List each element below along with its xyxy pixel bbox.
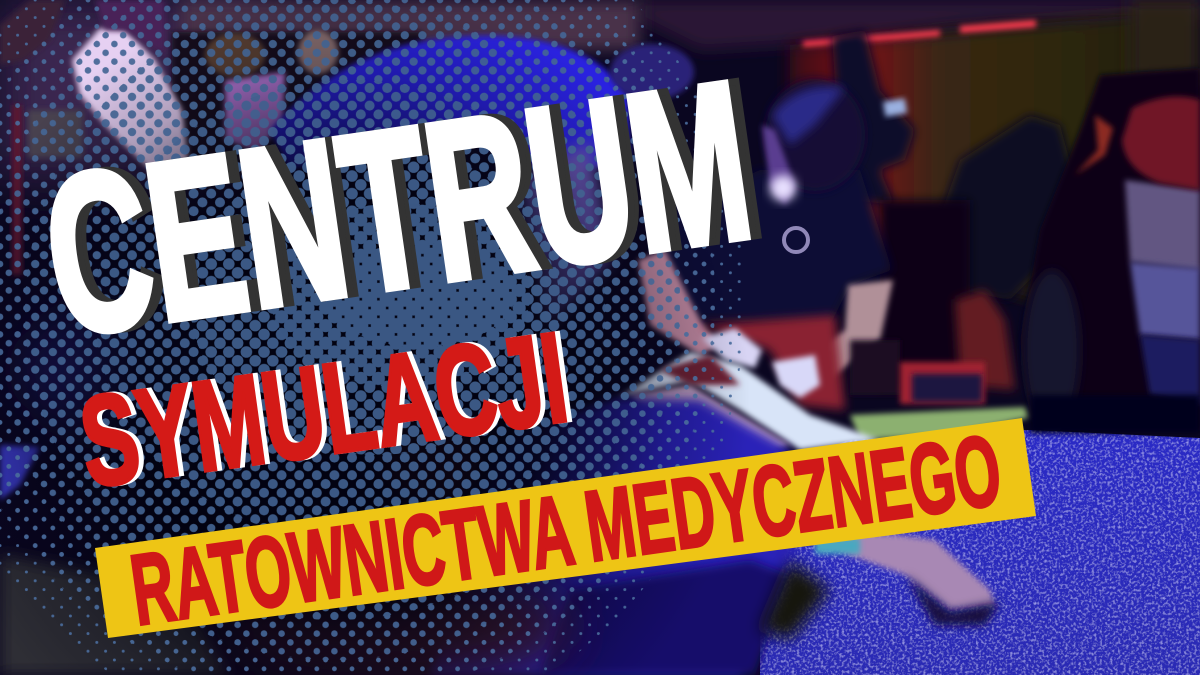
pink sheet (225, 72, 285, 152)
head lamp (770, 175, 796, 201)
red patch near centre (380, 420, 480, 500)
knee (230, 575, 570, 675)
patient trousers (540, 560, 790, 675)
banner background (95, 418, 1036, 638)
orange trousers (955, 290, 1015, 390)
heading: SYMULACJI: SYMULACJI (72, 306, 575, 515)
woman in white blouse (72, 28, 190, 175)
right arm (790, 280, 893, 390)
back of blonde people (205, 33, 265, 77)
car (1020, 68, 1200, 430)
heading: SYMULACJI (72, 305, 580, 515)
hand with phone (0, 0, 65, 65)
orange trousers of rescuer (700, 315, 845, 410)
crouching person (935, 115, 1075, 300)
floor left (0, 555, 230, 675)
tyre (1024, 270, 1080, 430)
rescuer face (762, 125, 795, 205)
rescuer t-shirt (650, 170, 892, 325)
dark panel behind blonde people (172, 32, 422, 162)
curtain far right (1130, 0, 1200, 80)
grey case left (28, 110, 83, 158)
dark legs of standing person (880, 200, 970, 390)
blue floor patch left (0, 445, 40, 500)
banner: RATOWNICTWA MEDYCZNEGO (95, 414, 1036, 647)
helmet (610, 44, 694, 100)
red LED strips (803, 20, 1036, 47)
red strip (12, 105, 22, 275)
patient collar and head (618, 352, 880, 450)
ceiling (640, 0, 1200, 50)
left arm (638, 250, 720, 355)
patient blue jacket (430, 398, 800, 675)
left wall (0, 0, 260, 180)
gloves (702, 328, 762, 368)
grass shadow under patient (760, 560, 830, 640)
rescuer hair (765, 79, 865, 191)
phone (883, 98, 907, 117)
halftone dot overlay (0, 0, 741, 672)
heading: SYMULACJI: SYMULACJI (77, 305, 580, 514)
floor right (760, 430, 1200, 675)
cyan cuff (815, 538, 860, 554)
floor shadow under car (1030, 395, 1200, 433)
stretcher (850, 407, 1028, 440)
blue patch left (30, 310, 210, 430)
rear standing person (820, 30, 915, 205)
rescuer in blue shirt (270, 36, 630, 175)
patient arm (800, 530, 995, 610)
heading: CENTRUM (31, 31, 776, 384)
back wall with red and olive light (790, 15, 1140, 300)
rescuer arm (520, 140, 610, 330)
bag and equipment (850, 340, 900, 395)
emblem (784, 228, 808, 252)
